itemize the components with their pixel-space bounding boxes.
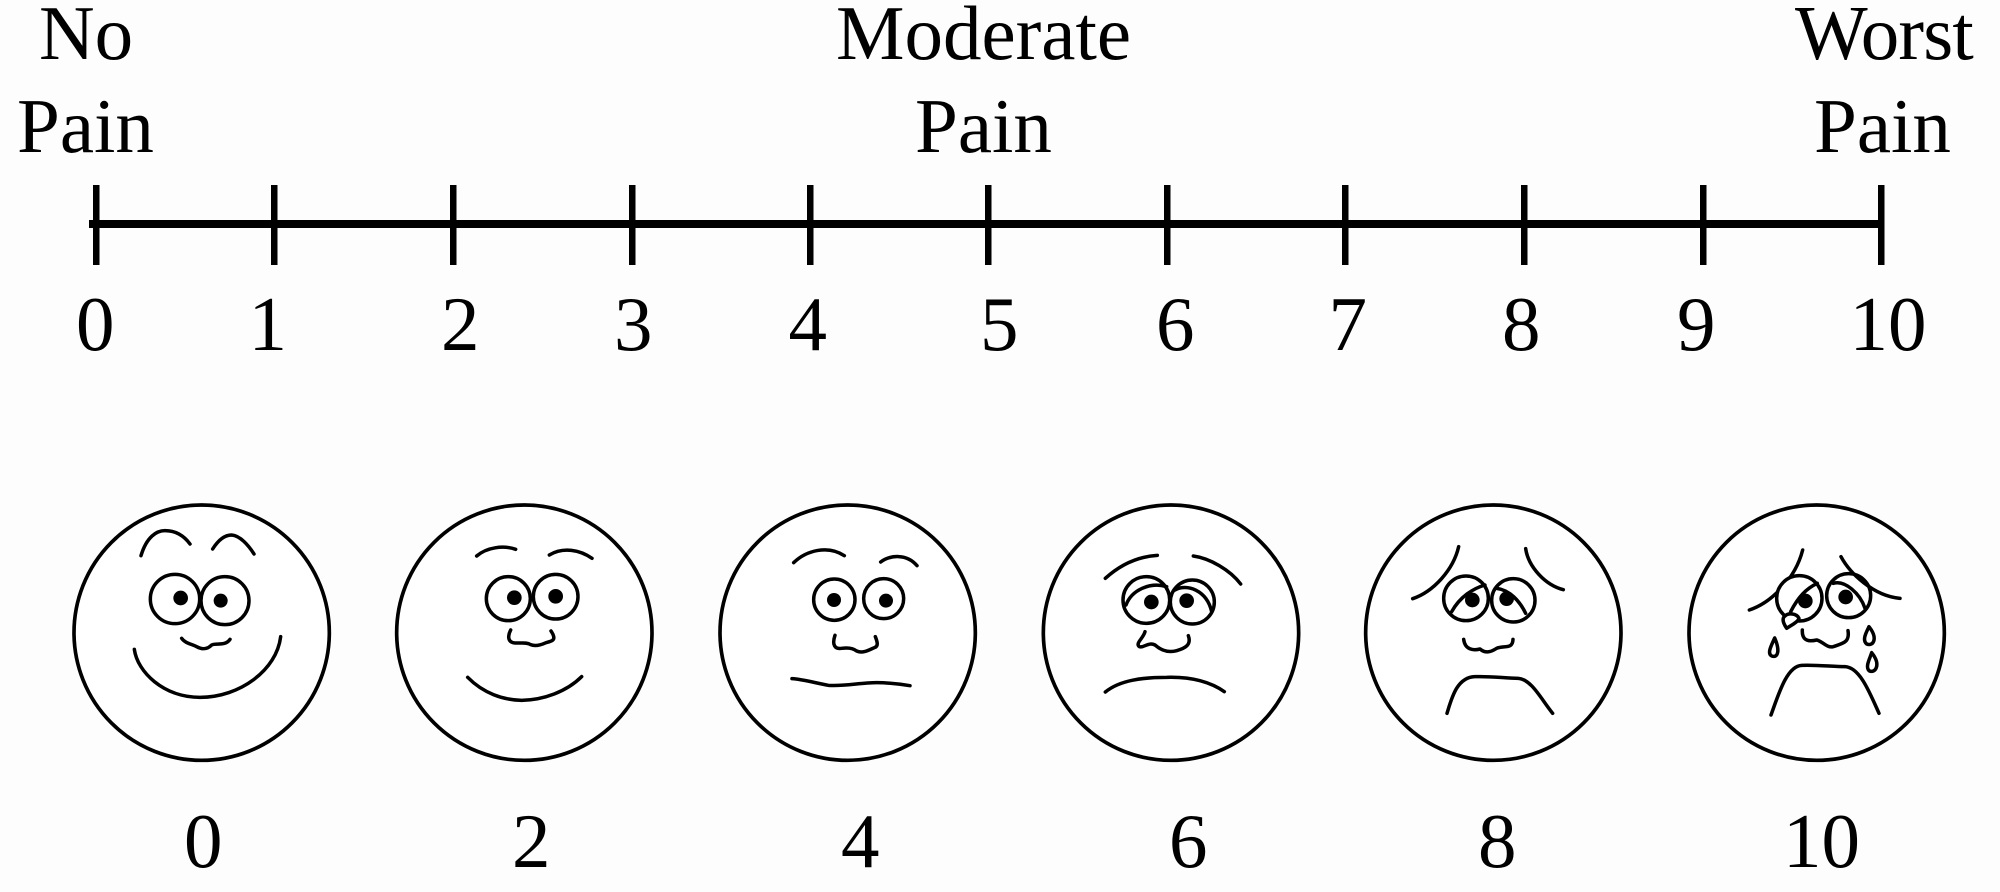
scale numbers 0 to 10: 9 <box>1677 281 1716 367</box>
scale numbers 0 to 10: 7 <box>1328 281 1367 367</box>
face score labels: 0 <box>184 798 222 884</box>
icon: face 8, strong frown <box>1366 505 1621 760</box>
heading: No Pain <box>17 0 154 169</box>
scale numbers 0 to 10: 3 <box>614 281 652 367</box>
heading: Worst Pain <box>1795 0 1973 169</box>
face score labels: 10 <box>1783 798 1860 884</box>
numeric scale line with ticks <box>89 185 1884 265</box>
heading: Moderate Pain <box>836 0 1131 169</box>
face score labels: 2 <box>512 798 550 884</box>
scale numbers 0 to 10: 2 <box>441 281 480 367</box>
scale numbers 0 to 10: 5 <box>980 281 1018 367</box>
scale numbers 0 to 10 <box>76 281 1926 367</box>
face score labels: 4 <box>841 798 880 884</box>
icon: face 2, slight smile <box>397 505 652 760</box>
scale numbers 0 to 10: 8 <box>1502 281 1540 367</box>
icon: face 6, slight frown <box>1043 505 1299 760</box>
scale numbers 0 to 10: 10 <box>1850 281 1926 367</box>
face score labels <box>184 798 1860 884</box>
icon: face 10, crying <box>1689 505 1944 760</box>
face score labels: 6 <box>1169 798 1208 884</box>
scale numbers 0 to 10: 0 <box>76 281 114 367</box>
scale numbers 0 to 10: 1 <box>248 281 287 367</box>
face score labels: 8 <box>1478 798 1516 884</box>
heading: No Pain: Pain <box>17 83 154 169</box>
icon: face 0, big smile <box>74 505 329 760</box>
scale numbers 0 to 10: 6 <box>1156 281 1194 367</box>
heading: Moderate Pain: Pain <box>915 83 1052 169</box>
heading: Worst Pain: Pain <box>1814 83 1951 169</box>
scale numbers 0 to 10: 4 <box>788 281 827 367</box>
icon: face 4, neutral <box>720 505 975 760</box>
